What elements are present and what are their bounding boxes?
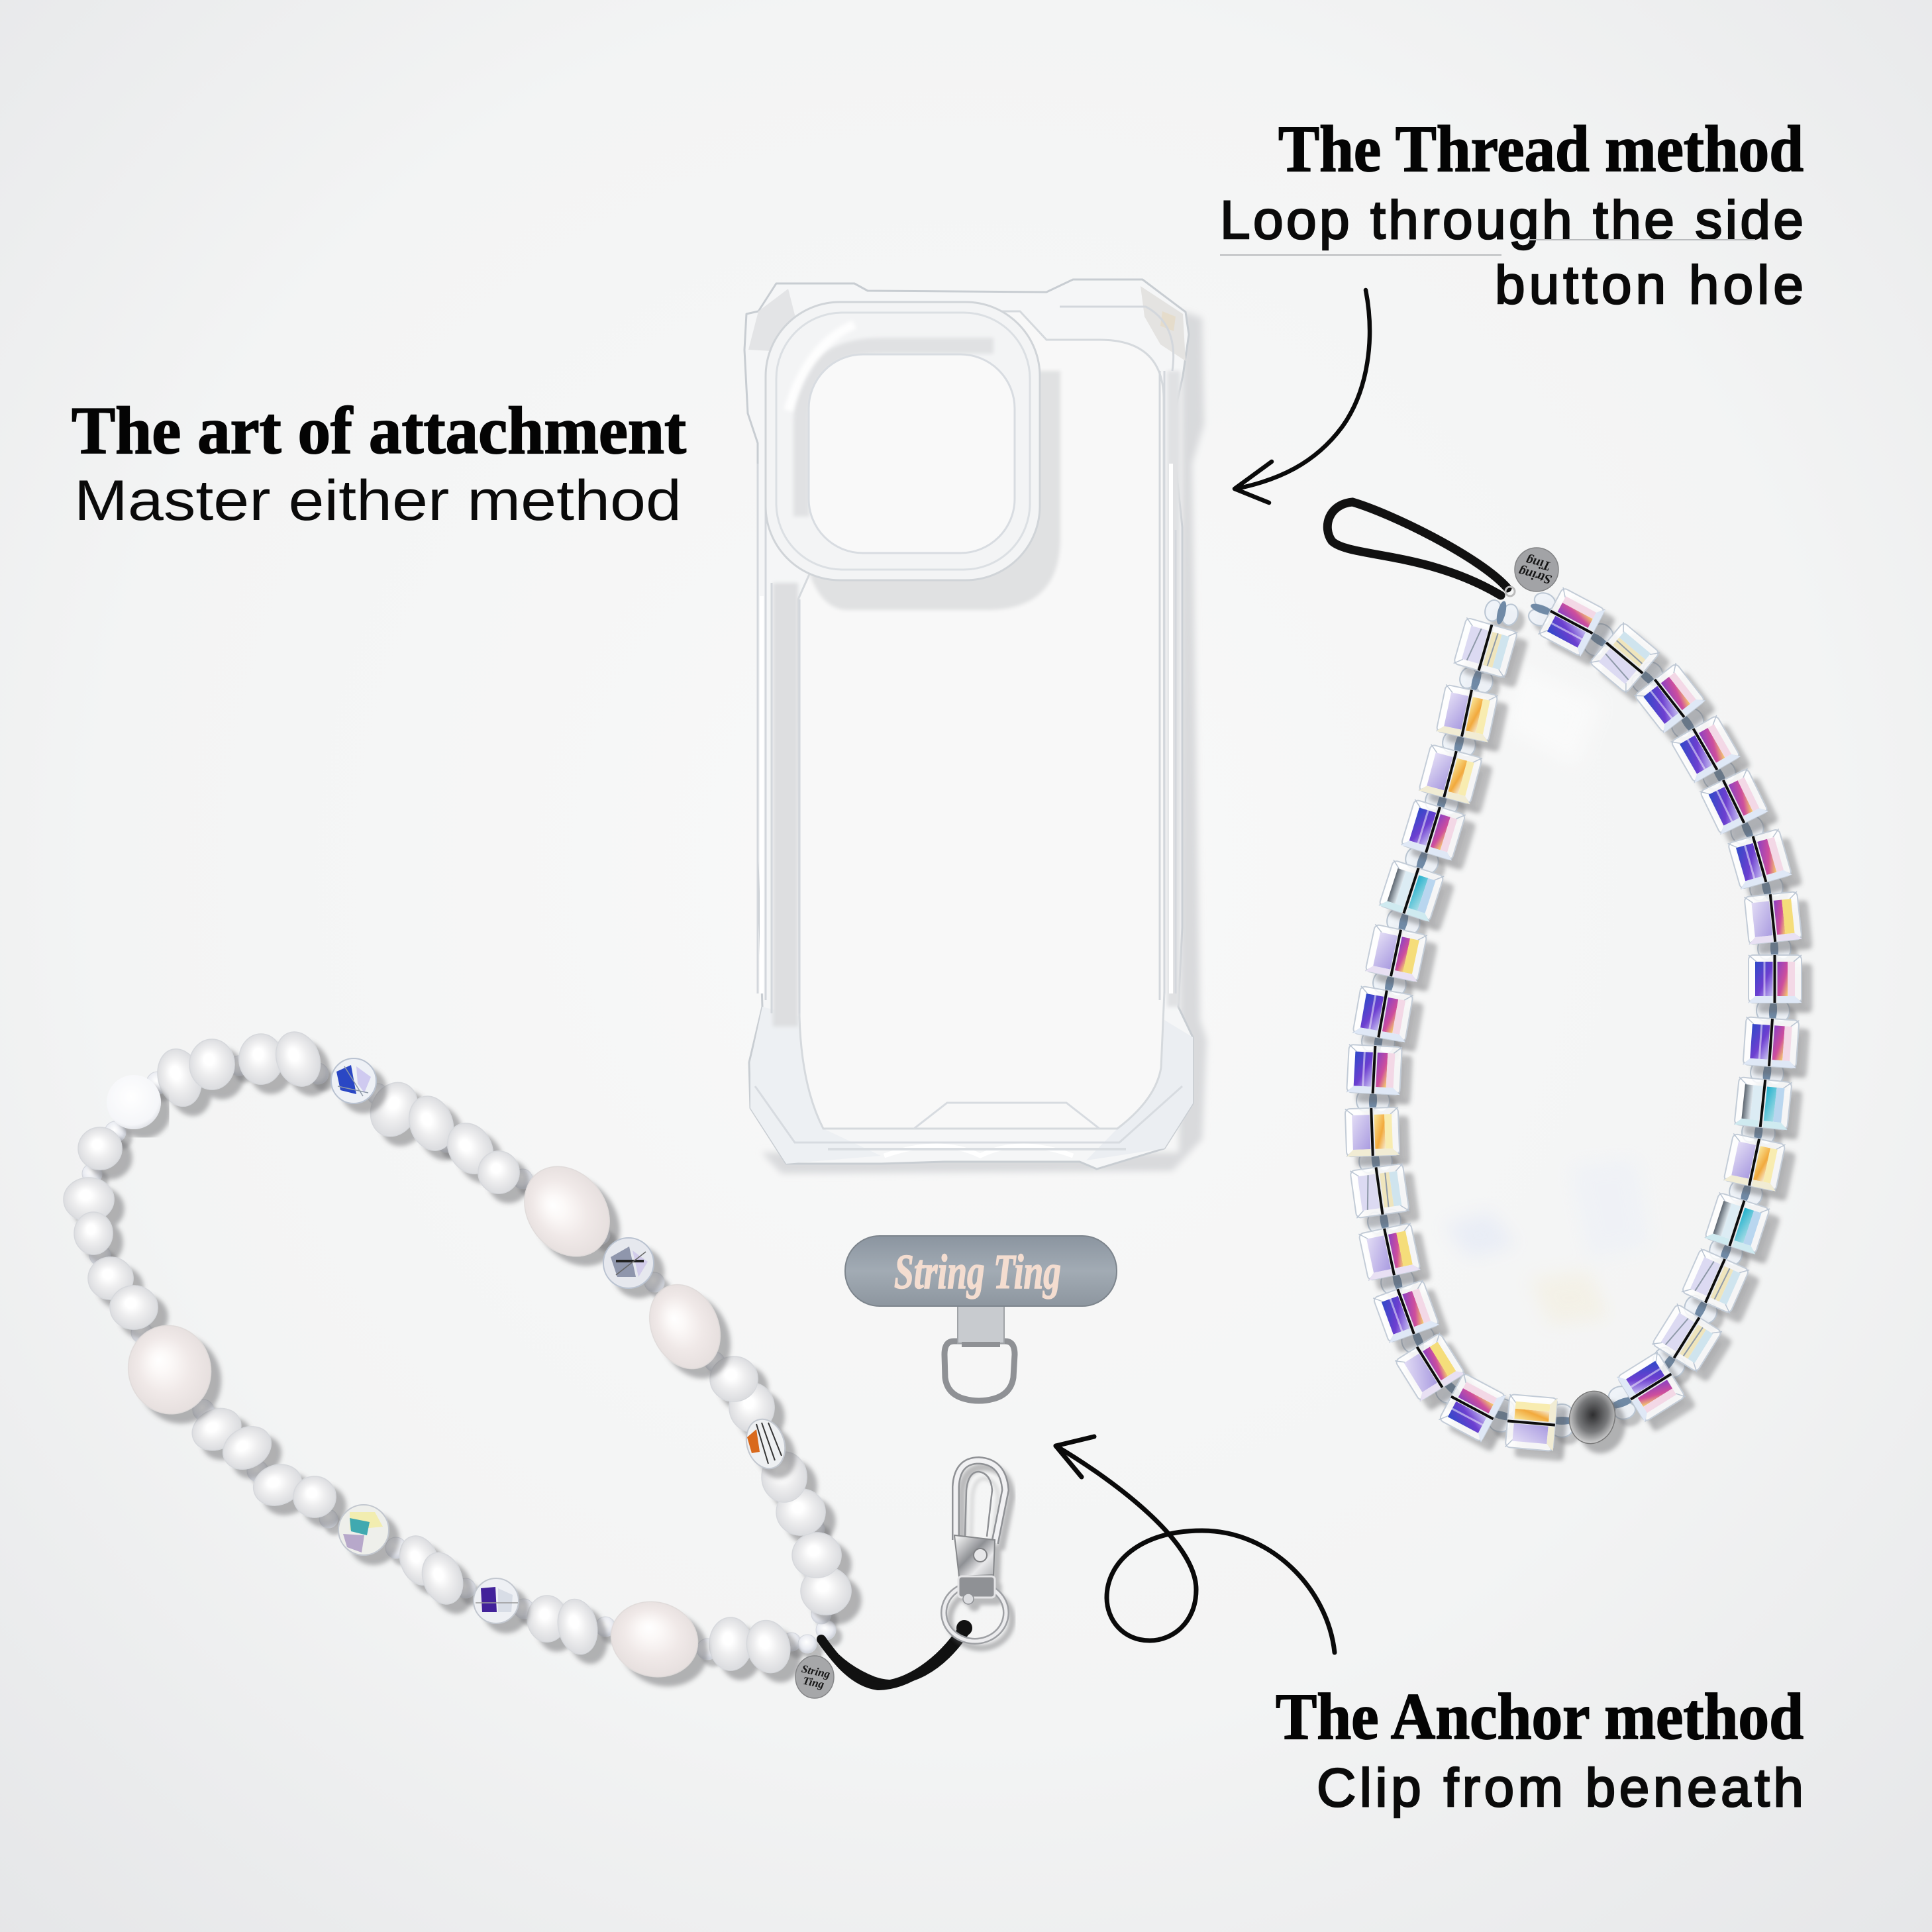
title block xyxy=(72,393,686,533)
crystal cube beads xyxy=(1345,587,1802,1451)
metal tag xyxy=(1505,548,1558,596)
D-ring xyxy=(944,1341,1015,1401)
faceted crystal beads xyxy=(331,1058,791,1623)
carabiner clip and ring xyxy=(944,1460,1006,1641)
tab plate xyxy=(845,1236,1117,1306)
crystal: grey xyxy=(603,1238,654,1288)
metal tag: String xyxy=(1517,564,1553,587)
side bands xyxy=(773,371,1180,1027)
clip body xyxy=(954,1535,995,1576)
white round bead xyxy=(107,1075,161,1129)
callout: The Anchor method xyxy=(1276,1680,1804,1818)
baroque faux pearls xyxy=(64,1026,851,1678)
arrow: anchor method pointing to tab xyxy=(1056,1437,1335,1652)
handwritten line: button hole: button hole xyxy=(1495,255,1804,315)
metal tag: Ting xyxy=(801,1674,826,1691)
callout: The Thread method xyxy=(1220,112,1804,315)
metal tag xyxy=(795,1652,834,1698)
case shadows xyxy=(762,311,1207,1174)
black cord loop xyxy=(1327,502,1507,595)
clip hook xyxy=(956,1460,1005,1543)
heading: The Thread method: The Thread method xyxy=(1278,112,1804,185)
split ring xyxy=(944,1584,1006,1641)
brand wordmark: String Ting xyxy=(894,1245,1061,1299)
crystal: iridescent xyxy=(338,1505,389,1555)
camera shadow xyxy=(808,371,1060,610)
metal tag: Ting xyxy=(1524,553,1552,574)
handwritten line: Loop through the side: Loop through the side xyxy=(1220,190,1804,250)
large freshwater pearls xyxy=(119,1150,733,1686)
crystal: orange xyxy=(740,1414,791,1474)
crystal: blue xyxy=(331,1058,376,1103)
connector tab xyxy=(845,1236,1117,1401)
black cord xyxy=(821,1629,963,1686)
metal tag: String xyxy=(801,1662,831,1681)
crystal: purple xyxy=(474,1578,519,1623)
arrow: thread method pointing to case xyxy=(1235,290,1370,503)
case body outline xyxy=(744,280,1193,1169)
seed beads xyxy=(1356,589,1792,1437)
seed beads xyxy=(82,1056,836,1660)
pearl wrist strap xyxy=(64,1026,1006,1698)
crystal wrist strap xyxy=(1327,502,1802,1451)
metal tongue xyxy=(958,1303,1004,1343)
case corners milky tint xyxy=(748,286,1193,1164)
subheading: Master either method: Master either method xyxy=(74,469,682,533)
heading: The Anchor method: The Anchor method xyxy=(1276,1680,1804,1753)
phone case xyxy=(744,280,1207,1174)
swivel barrel xyxy=(958,1576,995,1598)
case inner window xyxy=(798,311,1164,1129)
heading: The art of attachment: The art of attachment xyxy=(72,393,686,468)
silver rondelle bead xyxy=(1564,1386,1621,1449)
camera cutout ring xyxy=(766,302,1040,580)
handwritten line: Clip from beneath: Clip from beneath xyxy=(1317,1758,1804,1818)
